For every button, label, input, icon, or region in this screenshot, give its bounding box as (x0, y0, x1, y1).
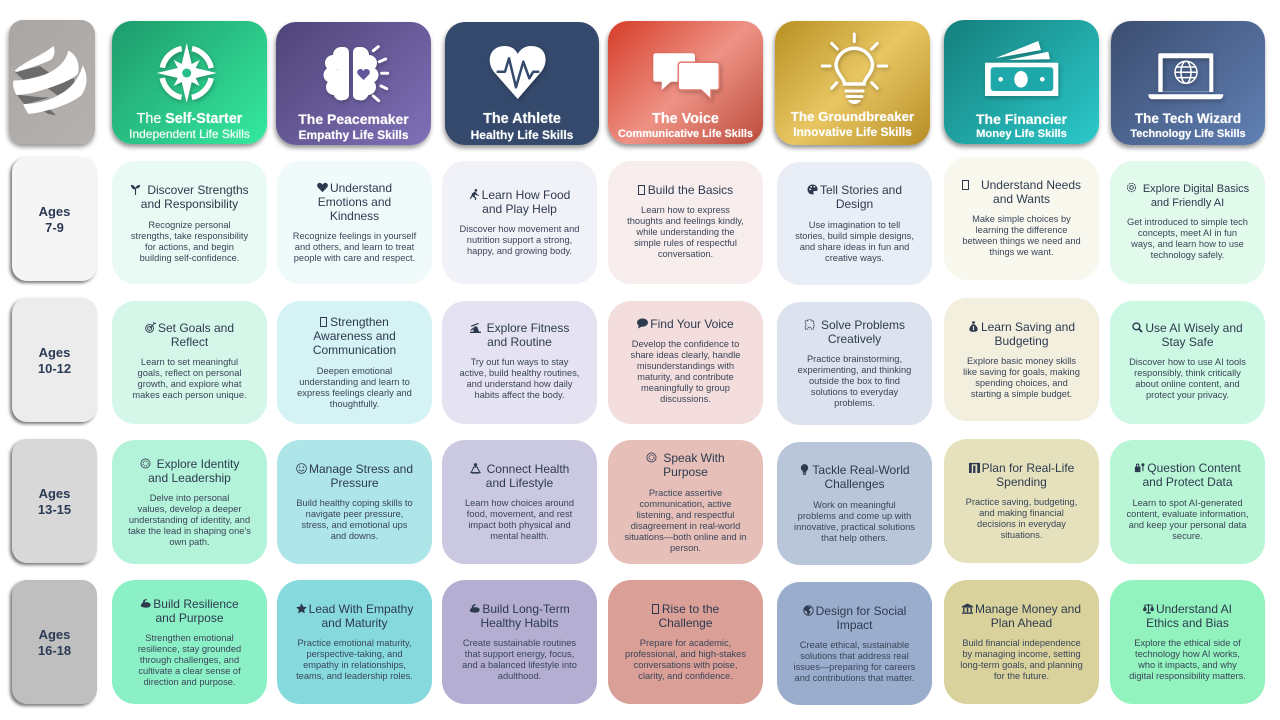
card: Design for Social Impact: Design for Social (816, 604, 906, 618)
card: Rise to the Challenge (608, 580, 763, 704)
card: Learn How Food and Play Help: and Play Help (482, 202, 557, 216)
card: Discover Strengths and Responsibility: and Responsibility (141, 197, 238, 211)
title: The Tech Wizard: The Tech Wizard (1135, 111, 1241, 126)
card: Learn How Food and Play Help: nutrition support a strong, (467, 234, 572, 244)
age label: 13-15 (12, 439, 97, 563)
card: Understand Emotions and Kindness: Kindness (330, 209, 379, 223)
card: Build Resilience and Purpose: direction and purpose. (144, 676, 236, 686)
age label: 10-12 (12, 298, 97, 422)
card: Lead With Empathy and Maturity (277, 580, 432, 704)
card: Discover Strengths and Responsibility: for actions, and begin (145, 242, 234, 252)
icon: light bulb (820, 32, 890, 108)
card: Find Your Voice: discussions. (660, 394, 711, 404)
card: Connect Health and Lifestyle: Learn how choices around (465, 498, 574, 508)
card: Discover Strengths and Responsibility: Discover Strengths (147, 183, 249, 197)
title: The Groundbreaker: Innovative Life Skills (793, 125, 912, 139)
card: Understand Needs and Wants: learning the difference (976, 224, 1067, 234)
card: Find Your Voice (608, 301, 763, 424)
card: Understand Emotions and Kindness: Recognize feelings in yourself (293, 230, 416, 240)
card: Tell Stories and Design: stories, build simple designs, (795, 230, 914, 240)
title: The Self-Starter: The Self-Starter (137, 111, 242, 127)
card: Question Content and Protect Data: Question Content (1147, 461, 1241, 475)
card: Speak With Purpose: Practice assertive (649, 488, 722, 498)
card: Discover Strengths and Responsibility: building self-confidence. (140, 252, 239, 262)
title: The Athlete (470, 111, 574, 142)
title: The Voice: Communicative Life Skills (618, 128, 753, 140)
card: Strengthen Awareness and Communication: Strengthen (330, 315, 389, 329)
card: Rise to the Challenge: clarity, and confidence. (638, 670, 733, 680)
card: Rise to the Challenge: Challenge (658, 616, 713, 630)
card: Find Your Voice: maturity, and contribute (637, 372, 734, 382)
card: Understand Emotions and Kindness: Emotions and (318, 195, 391, 209)
card: Build the Basics: conversation. (658, 248, 713, 258)
icon: brain with heart (323, 45, 390, 105)
card: Connect Health and Lifestyle: and Lifestyle (486, 476, 553, 490)
card: Build Long-Term Healthy Habits: Healthy Habits (480, 616, 559, 630)
card: Understand Emotions and Kindness: and others, and learn to treat (295, 242, 414, 252)
card: Understand Needs and Wants: and Wants (993, 192, 1050, 206)
card: Rise to the Challenge: Prepare for academic, (640, 638, 731, 648)
card: Solve Problems Creatively: Practice brainstorming, (807, 354, 902, 364)
age label: 16-18: 16-18 (38, 643, 71, 658)
card: Understand AI Ethics and Bias: Understand AI (1156, 602, 1232, 616)
card: Explore Digital Basics and Friendly AI: Explore Digital Basics (1143, 183, 1249, 195)
card: Explore Identity and Leadership: Delve into personal (150, 492, 229, 502)
card: Speak With Purpose: disagreement in real-world (631, 520, 740, 530)
card: Solve Problems Creatively: experimenting, and thinking (798, 364, 911, 374)
card: Manage Stress and Pressure: navigate peer pressure, (306, 508, 403, 518)
card: Build Long-Term Healthy Habits: Build Long-Term (482, 602, 570, 616)
card: Use AI Wisely and Stay Safe: Stay Safe (1161, 335, 1214, 349)
card: Explore Identity and Leadership: own path. (169, 536, 210, 546)
card: Lead With Empathy and Maturity: Practice emotional maturity, (297, 638, 412, 648)
card: Solve Problems Creatively: outside the box to find (809, 376, 900, 386)
card: Explore Fitness and Routine: habits affect the body. (474, 390, 565, 400)
card: Build Resilience and Purpose: through challenges, and (140, 654, 239, 664)
age label: 7-9 (12, 157, 97, 281)
card: Plan for Real-Life Spending (944, 439, 1099, 563)
card: Manage Stress and Pressure (277, 440, 432, 564)
card: Explore Digital Basics and Friendly AI: concepts, meet AI in fun (1138, 228, 1237, 238)
card: Use AI Wisely and Stay Safe: about online content, and (1135, 379, 1240, 389)
card: Use AI Wisely and Stay Safe: responsibly, think critically (1134, 368, 1241, 378)
card: Question Content and Protect Data: and Protect Data (1142, 475, 1233, 489)
card: Design for Social Impact: Impact (836, 618, 872, 632)
card: Solve Problems Creatively (777, 302, 932, 425)
card: Understand Needs and Wants: between things we need and (962, 236, 1081, 246)
icon: speech bubbles (652, 53, 724, 103)
title: The Financier: Money Life Skills (976, 128, 1067, 140)
card: Strengthen Awareness and Communication (277, 301, 432, 424)
card: Use AI Wisely and Stay Safe: protect your privacy. (1146, 390, 1229, 400)
card: Solve Problems Creatively: Creatively (828, 332, 881, 346)
card: Build the Basics: Learn how to express (641, 204, 730, 214)
card: Question Content and Protect Data: and keep your personal data (1129, 520, 1246, 530)
card: Explore Fitness and Routine: Explore Fitness (487, 321, 569, 335)
card: Speak With Purpose: Speak With (663, 451, 725, 465)
card: Question Content and Protect Data: secure. (1172, 530, 1203, 540)
card: Design for Social Impact: and contributions that matter. (795, 672, 914, 682)
card: Manage Stress and Pressure: stress, and emotional ups (302, 520, 407, 530)
header: The Groundbreaker (775, 21, 930, 145)
card: Learn Saving and Budgeting (944, 298, 1099, 421)
card: Understand Needs and Wants: Understand Needs (981, 178, 1081, 192)
card: Build Resilience and Purpose: Strengthen emotional (145, 632, 234, 642)
card: Understand Needs and Wants: Make simple choices by (972, 214, 1071, 224)
header: The Athlete (445, 22, 599, 145)
card: Tell Stories and Design: Design (836, 197, 873, 211)
card: Explore Digital Basics and Friendly AI: technology safely. (1151, 250, 1224, 260)
card: Manage Stress and Pressure: Pressure (330, 476, 379, 490)
card: Tackle Real-World Challenges: that help others. (821, 532, 888, 542)
card: Tackle Real-World Challenges: Tackle Real-World (812, 463, 910, 477)
card: Lead With Empathy and Maturity: empathy in relationships, (303, 660, 406, 670)
card: Build the Basics (608, 161, 763, 284)
card: Solve Problems Creatively: Solve Problems (821, 318, 905, 332)
card: Manage Money and Plan Ahead: for the future. (994, 670, 1049, 680)
card: Question Content and Protect Data: content, evaluate information, (1127, 508, 1248, 518)
icon: compass (157, 43, 216, 104)
card: Design for Social Impact (777, 582, 932, 705)
card: Speak With Purpose: communication, active (640, 498, 731, 508)
card: Explore Fitness and Routine: and Routine (487, 335, 552, 349)
card: Tell Stories and Design (777, 162, 932, 285)
card: Learn Saving and Budgeting: starting a simple budget. (971, 388, 1072, 398)
title: The Groundbreaker: The Groundbreaker (791, 109, 914, 124)
card: Discover Strengths and Responsibility (112, 161, 267, 284)
title: The Tech Wizard: Technology Life Skills (1130, 128, 1246, 140)
header: The Voice (608, 21, 763, 144)
card: Manage Money and Plan Ahead: Manage Money and (975, 602, 1081, 616)
title: The Voice (618, 111, 753, 140)
card: Speak With Purpose: listening, and respectful (637, 510, 734, 520)
card: Tell Stories and Design: creative ways. (825, 252, 884, 262)
card: Set Goals and Reflect: Learn to set meaningful (141, 356, 238, 366)
card: Learn How Food and Play Help: Discover how movement and (460, 224, 579, 234)
card: Find Your Voice: share ideas clearly, handle (631, 350, 740, 360)
age label: 13-15: Ages (39, 486, 70, 501)
card: Understand AI Ethics and Bias: Ethics and Bias (1146, 616, 1229, 630)
card: Learn How Food and Play Help: Learn How Food (482, 188, 570, 202)
title: The Athlete: Healthy Life Skills (471, 128, 573, 142)
header: The Financier (944, 20, 1099, 144)
card: Build the Basics: Build the Basics (648, 183, 733, 197)
icon: striped globe logo (13, 46, 86, 116)
age label: 16-18: Ages (39, 627, 70, 642)
card: Connect Health and Lifestyle: food, movement, and rest (467, 508, 572, 518)
card: Manage Stress and Pressure: and downs. (331, 530, 378, 540)
title: The Athlete: The Athlete (483, 111, 561, 127)
card: Learn Saving and Budgeting: Explore basic money skills (967, 356, 1076, 366)
icon: heart with pulse (490, 46, 548, 100)
age label: 13-15: 13-15 (38, 502, 71, 517)
card: Strengthen Awareness and Communication: Awareness and (313, 329, 396, 343)
card: Set Goals and Reflect: Reflect (171, 335, 208, 349)
card: Tackle Real-World Challenges: problems and come up with (798, 510, 911, 520)
card: Understand Emotions and Kindness: Understand (330, 181, 392, 195)
card: Tackle Real-World Challenges: Challenges (824, 477, 885, 491)
title: The Groundbreaker (790, 109, 914, 139)
card: Build the Basics: simple rules of respectful (634, 238, 737, 248)
card: Explore Fitness and Routine: Try out fun ways to stay (471, 356, 568, 366)
card: Connect Health and Lifestyle: mental health. (490, 530, 549, 540)
card: Explore Digital Basics and Friendly AI: Get introduced to simple tech (1127, 216, 1248, 226)
card: Explore Identity and Leadership: Explore Identity (157, 457, 239, 471)
card: Build Long-Term Healthy Habits (442, 580, 597, 704)
title: The Financier: The Financier (976, 111, 1067, 127)
card: Find Your Voice: Develop the confidence to (632, 338, 739, 348)
card: Explore Identity and Leadership: values, develop a deeper (138, 504, 241, 514)
card: Solve Problems Creatively: problems. (834, 398, 875, 408)
title: The Peacemaker (298, 111, 409, 142)
card: Build Long-Term Healthy Habits: that support energy, focus, (465, 648, 574, 658)
title: The Tech Wizard (1130, 111, 1246, 140)
card: Explore Fitness and Routine: and understand how daily (467, 378, 572, 388)
card: Question Content and Protect Data (1110, 440, 1265, 564)
age label: 10-12: Ages (39, 345, 70, 360)
card: Design for Social Impact: issues—preparing for careers (794, 662, 915, 672)
card: Find Your Voice: Find Your Voice (650, 317, 734, 331)
card: Set Goals and Reflect (112, 301, 267, 424)
card: Explore Fitness and Routine: active, build healthy routines, (460, 368, 579, 378)
title: The Voice: The Voice (652, 111, 719, 127)
card: Strengthen Awareness and Communication: express feelings clearly and (297, 388, 412, 398)
card: Explore Identity and Leadership: understanding of identity, and (129, 514, 250, 524)
card: Question Content and Protect Data: Learn to spot AI-generated (1132, 498, 1243, 508)
header: The Peacemaker (276, 22, 431, 145)
title: The Self-Starter: Independent Life Skills (129, 127, 250, 141)
card: Solve Problems Creatively: solutions to everyday (811, 386, 898, 396)
card: Plan for Real-Life Spending: and making financial (979, 508, 1064, 518)
card: Speak With Purpose: person. (670, 542, 701, 552)
card: Discover Strengths and Responsibility: Recognize personal (148, 220, 231, 230)
card: Strengthen Awareness and Communication: Deepen emotional (317, 366, 392, 376)
card: Manage Money and Plan Ahead: Plan Ahead (991, 616, 1052, 630)
header: The Self-Starter (112, 21, 267, 144)
card: Understand AI Ethics and Bias: digital responsibility matters. (1129, 670, 1246, 680)
card: Manage Money and Plan Ahead: long-term goals, and planning (960, 660, 1083, 670)
card: Learn How Food and Play Help: happy, and growing body. (467, 246, 572, 256)
card: Strengthen Awareness and Communication: thoughtfully. (330, 398, 379, 408)
card: Discover Strengths and Responsibility: strengths, take responsibility (131, 230, 248, 240)
card: Build Long-Term Healthy Habits: Create sustainable routines (463, 638, 576, 648)
age label: 16-18 (12, 580, 97, 704)
card: Set Goals and Reflect: growth, and explore what (138, 378, 241, 388)
card: Build Resilience and Purpose: resilience, stay grounded (138, 644, 241, 654)
card: Build the Basics: while understanding the (636, 226, 735, 236)
card: Use AI Wisely and Stay Safe (1110, 301, 1265, 424)
card: Explore Digital Basics and Friendly AI: and Friendly AI (1151, 197, 1224, 209)
card: Rise to the Challenge: professional, and high-stakes (625, 648, 746, 658)
card: Understand AI Ethics and Bias (1110, 580, 1265, 704)
card: Lead With Empathy and Maturity: perspective-taking, and (306, 648, 403, 658)
card: Plan for Real-Life Spending: Spending (996, 475, 1047, 489)
card: Manage Stress and Pressure: Build healthy coping skills to (296, 498, 413, 508)
card: Explore Identity and Leadership: take the lead in shaping one's (128, 526, 251, 536)
card: Understand AI Ethics and Bias: who it impacts, and why (1138, 660, 1237, 670)
card: Rise to the Challenge: Rise to the (662, 602, 719, 616)
card: Plan for Real-Life Spending: Plan for Real-Life (982, 461, 1074, 475)
card: Understand Needs and Wants (944, 157, 1099, 280)
card: Rise to the Challenge: conversations with poise, (634, 660, 737, 670)
card: Connect Health and Lifestyle (442, 440, 597, 564)
card: Set Goals and Reflect: Set Goals and (158, 321, 234, 335)
card: Strengthen Awareness and Communication: Communication (313, 343, 396, 357)
icon: laptop with globe (1148, 53, 1225, 103)
card: Learn Saving and Budgeting: Learn Saving and (981, 320, 1075, 334)
card: Connect Health and Lifestyle: Connect Health (487, 462, 569, 476)
card: Design for Social Impact: solutions that address real (800, 650, 909, 660)
card: Use AI Wisely and Stay Safe: Discover how to use AI tools (1129, 357, 1246, 367)
card: Lead With Empathy and Maturity: teams, and leadership roles. (296, 670, 413, 680)
title: The Financier (976, 111, 1068, 140)
title: The Peacemaker: The Peacemaker (298, 111, 409, 127)
logo tile (9, 20, 95, 144)
card: Lead With Empathy and Maturity: and Maturity (321, 616, 388, 630)
card: Manage Money and Plan Ahead (944, 580, 1099, 704)
title: The Peacemaker: Empathy Life Skills (298, 128, 409, 142)
card: Manage Stress and Pressure: Manage Stress and (309, 462, 413, 476)
card: Learn Saving and Budgeting: like saving for goals, making (963, 366, 1080, 376)
card: Tackle Real-World Challenges: innovative, practical solutions (794, 522, 915, 532)
card: Manage Money and Plan Ahead: Build financial independence (962, 638, 1081, 648)
card: Understand Emotions and Kindness: people with care and respect. (294, 252, 415, 262)
card: Explore Identity and Leadership: and Leadership (148, 471, 231, 485)
card: Build Long-Term Healthy Habits: adulthood. (498, 670, 541, 680)
card: Learn How Food and Play Help (442, 161, 597, 284)
card: Tell Stories and Design: Tell Stories and (820, 183, 902, 197)
card: Speak With Purpose: situations—both online and in (624, 532, 746, 542)
header: The Tech Wizard (1111, 21, 1265, 145)
card: Lead With Empathy and Maturity: Lead With Empathy (309, 602, 413, 616)
card: Strengthen Awareness and Communication: understanding and learn to (299, 376, 410, 386)
card: Connect Health and Lifestyle: impact both physical and (468, 520, 571, 530)
card: Tackle Real-World Challenges (777, 442, 932, 565)
card: Build Resilience and Purpose (112, 580, 267, 704)
age label: 10-12: 10-12 (38, 361, 71, 376)
card: Explore Identity and Leadership (112, 440, 267, 564)
card: Use AI Wisely and Stay Safe: Use AI Wisely and (1145, 321, 1243, 335)
card: Plan for Real-Life Spending: decisions in everyday (977, 518, 1066, 528)
card: Tell Stories and Design: and share ideas in fun and (800, 242, 909, 252)
title: The Self-Starter (129, 111, 250, 141)
age label: 7-9: Ages (39, 204, 70, 219)
card: Learn Saving and Budgeting: Budgeting (994, 334, 1049, 348)
card: Plan for Real-Life Spending: situations. (1001, 530, 1042, 540)
card: Understand Emotions and Kindness (277, 161, 432, 284)
card: Tell Stories and Design: Use imagination to tell (809, 220, 900, 230)
card: Understand AI Ethics and Bias: Explore the ethical side of (1134, 638, 1241, 648)
card: Build Resilience and Purpose: Build Resilience (153, 597, 239, 611)
card: Learn Saving and Budgeting: spending choices, and (975, 378, 1068, 388)
card: Understand AI Ethics and Bias: technology how AI works, (1135, 648, 1240, 658)
card: Understand Needs and Wants: things we want. (989, 246, 1054, 256)
card: Tackle Real-World Challenges: Work on meaningful (813, 500, 896, 510)
card: Find Your Voice: meaningfully to group (641, 382, 730, 392)
card: Build Resilience and Purpose: cultivate a clear sense of (138, 666, 241, 676)
card: Manage Money and Plan Ahead: by managing income, setting (962, 648, 1081, 658)
card: Speak With Purpose: Purpose (663, 465, 708, 479)
card: Design for Social Impact: Create ethical, sustainable (800, 640, 909, 650)
card: Plan for Real-Life Spending: Practice saving, budgeting, (966, 496, 1077, 506)
icon: banknotes (984, 41, 1062, 100)
card: Set Goals and Reflect: makes each person unique. (132, 390, 247, 400)
age label: 7-9: 7-9 (45, 220, 64, 235)
card: Build the Basics: thoughts and feelings kindly, (627, 216, 744, 226)
card: Explore Fitness and Routine (442, 301, 597, 424)
card: Build Resilience and Purpose: and Purpose (155, 611, 224, 625)
card: Find Your Voice: misunderstandings with (637, 360, 734, 370)
card: Explore Digital Basics and Friendly AI: ways, and learn how to use (1131, 238, 1244, 248)
card: Explore Digital Basics and Friendly AI (1110, 161, 1265, 284)
card: Set Goals and Reflect: goals, reflect on personal (138, 368, 241, 378)
card: Speak With Purpose (608, 440, 763, 564)
card: Build Long-Term Healthy Habits: and a balanced lifestyle into (462, 660, 577, 670)
